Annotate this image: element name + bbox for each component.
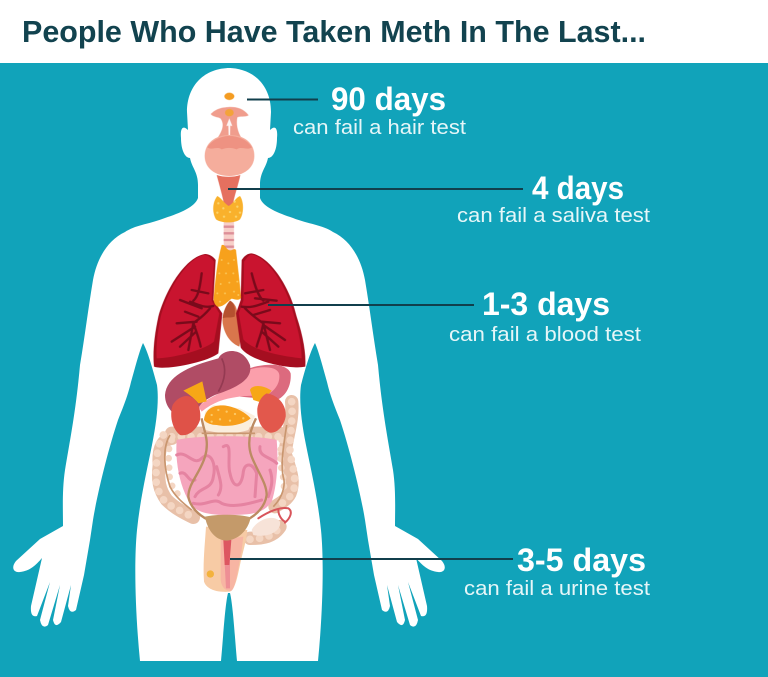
icon: stomach inner xyxy=(198,367,279,412)
icon: right kidney xyxy=(257,393,286,433)
icon: inner shaft xyxy=(221,537,243,591)
text block: urine test: can fail a urine test xyxy=(464,577,650,600)
icon: brain stem slit xyxy=(226,118,232,138)
text block: hair test: 90 days xyxy=(331,81,446,117)
icon: heart xyxy=(222,301,240,347)
icon: testis xyxy=(207,570,214,578)
icon: cecum xyxy=(252,518,280,536)
organs: head and chest xyxy=(154,93,305,368)
icon: right lung xyxy=(236,253,305,367)
icon: ureter crossbar xyxy=(202,431,255,436)
icon: stomach xyxy=(240,365,291,400)
icon: urethra xyxy=(223,540,231,565)
icon: throat xyxy=(217,175,240,208)
text block: saliva test: 4 days xyxy=(532,170,624,206)
arrow: urine test line xyxy=(230,558,513,560)
icon: male reproductive organ xyxy=(204,527,247,592)
organs: abdomen and pelvis xyxy=(156,351,295,592)
text block: blood test xyxy=(449,286,641,346)
text block: hair test: can fail a hair test xyxy=(293,116,466,139)
icon: bladder xyxy=(205,515,251,541)
icon: thyroid xyxy=(213,196,243,222)
icon: left adrenal gland xyxy=(183,381,207,403)
text block: saliva test: can fail a saliva test xyxy=(457,204,650,227)
icon: oral cavity xyxy=(205,135,254,176)
icon: trachea xyxy=(224,221,234,251)
icon: large intestine xyxy=(156,402,295,539)
arrow: blood test line xyxy=(268,304,474,306)
icon: urethra lower xyxy=(225,557,230,588)
icon: thymus xyxy=(214,245,241,307)
text block: blood test: can fail a blood test xyxy=(449,323,641,346)
icon: liver fold xyxy=(218,358,225,392)
icon: liver xyxy=(165,351,250,412)
icon: appendix xyxy=(258,508,291,523)
icon: outer ducts xyxy=(165,425,287,510)
icon: small intestine xyxy=(176,436,277,515)
arrow: saliva test line xyxy=(228,188,523,190)
text block: saliva test xyxy=(457,170,650,227)
icon: pancreas xyxy=(203,405,255,433)
icon: oral cavity shade xyxy=(207,136,252,149)
text block: hair test xyxy=(293,81,466,139)
text block: blood test: 1-3 days xyxy=(482,286,610,322)
icon: right adrenal gland xyxy=(250,386,272,403)
icon: ureters xyxy=(188,418,267,520)
title: People Who Have Taken Meth In The Last... xyxy=(22,14,646,49)
text block: urine test xyxy=(464,542,650,600)
body silhouette xyxy=(13,68,445,661)
icon: pineal gland xyxy=(224,93,234,100)
icon: pituitary gland xyxy=(225,109,234,116)
arrow: hair test line xyxy=(247,98,318,100)
icon: left lung xyxy=(154,254,222,368)
icon: left kidney xyxy=(171,396,200,435)
text block: urine test: 3-5 days xyxy=(517,542,646,578)
icon: sinus and nasal area xyxy=(211,107,249,138)
icon: heart tip xyxy=(223,301,235,318)
